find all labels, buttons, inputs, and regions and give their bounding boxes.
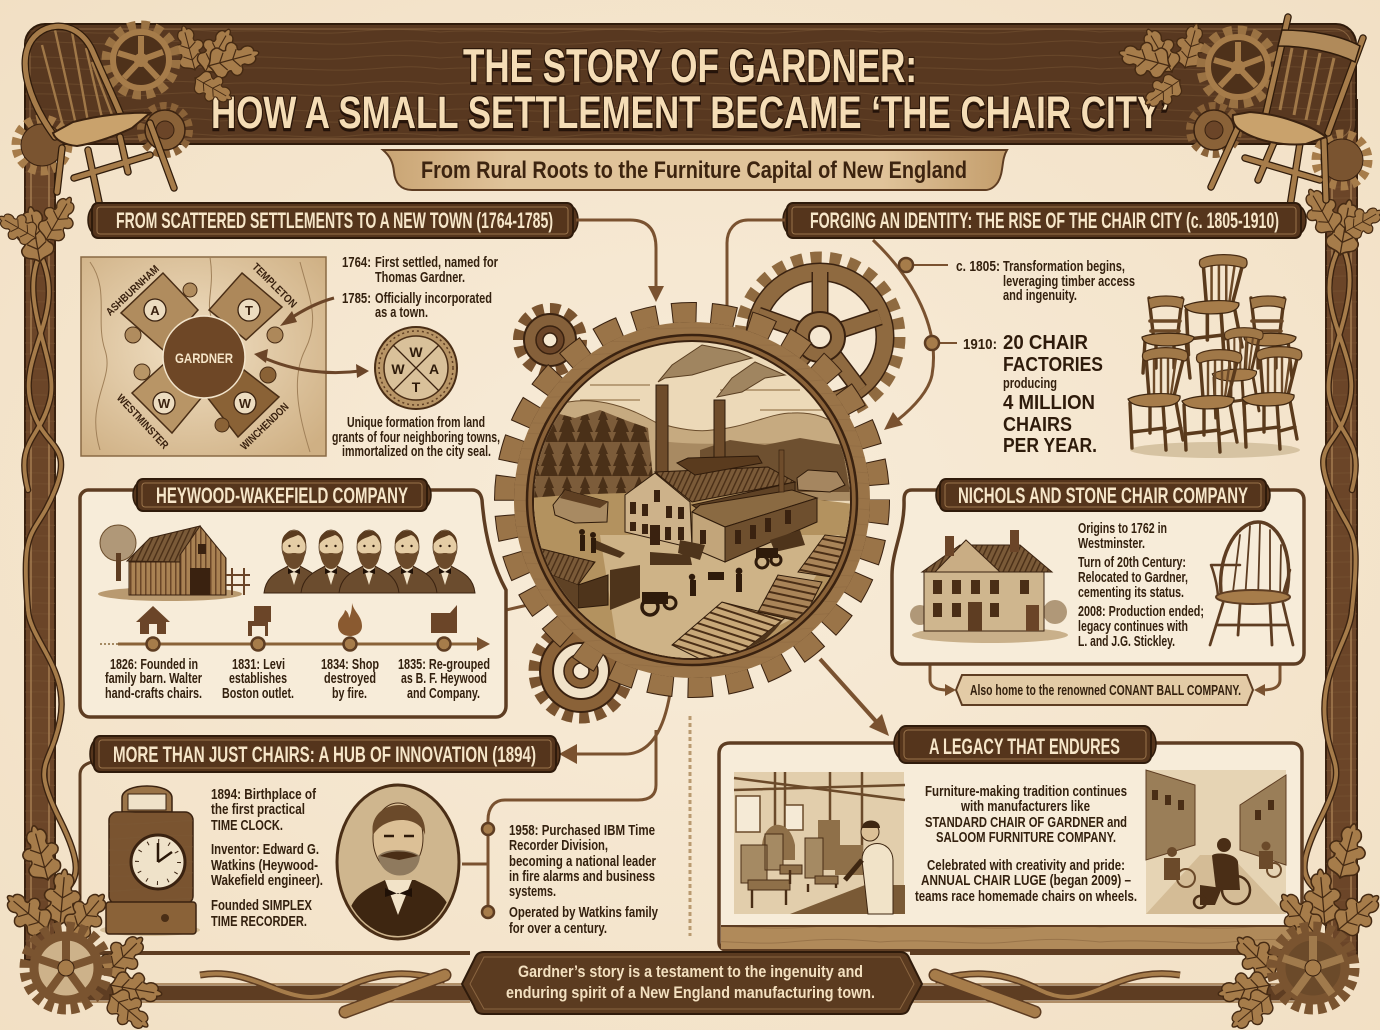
icon: chair [248,606,271,636]
Nichols history text: Relocated to Gardner, [1078,570,1188,586]
legacy text: teams race homemade chairs on wheels. [915,889,1137,905]
timeline 1910 statistics: PER YEAR. [1003,435,1097,457]
tractors and workers [579,529,781,615]
IBM and Watkins text: Operated by Watkins family [509,905,658,921]
timeline entry 1834: by fire. [332,686,367,702]
timeline entry 1834: 1834: Shop [321,657,379,673]
Nichols history text: Westminster. [1078,536,1145,552]
connector arrows around centre [462,220,1280,936]
arrow: 1785 to map [280,298,334,326]
oak leaves top corners [0,20,1380,265]
IBM and Watkins text: systems. [509,884,556,900]
title banner [25,24,1356,144]
settlement dates text: Thomas Gardner. [375,270,465,286]
timeline dots [482,258,939,918]
right trees [700,438,850,492]
illustration: Heywood brothers [264,530,475,593]
illustration: family barn [98,525,250,601]
section heading: forging an identity [783,203,1306,238]
Nichols history text [1078,521,1204,650]
wood strip [721,926,1300,949]
illustration: time clock [100,786,200,936]
legacy text [915,784,1137,905]
city seal [375,327,457,409]
Nichols history text: Origins to 1762 in [1078,521,1167,537]
heading: Nichols and Stone [936,479,1270,511]
factory building [625,450,817,562]
factory scene in gear [534,342,850,658]
heading: legacy [894,726,1156,763]
top-right gears [1190,31,1368,186]
timeline entry 1831: establishes [229,671,287,687]
puzzle piece: Westminster: W [158,396,171,411]
callout: Conant Ball [956,675,1253,705]
Nichols history text: 2008: Production ended; [1078,604,1204,620]
puzzle piece: Gardner: GARDNER [175,350,233,366]
legacy text: Celebrated with creativity and pride: [927,858,1125,874]
Windsor chair top-left [25,26,174,207]
legacy text: Furniture-making tradition continues [925,784,1127,800]
conclusion banner [462,952,922,1014]
callout: Conant Ball: Also home to the renowned CONANT BALL COMPANY. [970,683,1241,699]
heading: Nichols and Stone: NICHOLS AND STONE CHAIR COMPANY [958,483,1248,508]
puzzle piece: Ashburnham: A [150,303,160,318]
timeline 1910 statistics: CHAIRS [1003,414,1072,436]
formation caption: Unique formation from land [347,415,485,431]
section heading: scattered settlements: FROM SCATTERED SETTLEMENTS TO A NEW TOWN (1764-1785) [116,208,553,233]
illustration: Windsor chair [1210,522,1293,645]
settlement dates text: Officially incorporated [375,291,492,307]
IBM and Watkins text: 1958: Purchased IBM Time [509,823,655,839]
formation caption [332,415,500,460]
group of chairs [1128,255,1302,458]
panel: Heywood-Wakefield [80,479,506,717]
conclusion banner: Gardner’s story is a testament to the ingenuity and [518,962,863,981]
timeline entry 1834: destroyed [324,671,376,687]
puzzle piece: Winchendon [207,367,291,453]
lower-left workshop [542,548,608,610]
chimneys and smoke [656,345,785,475]
timeline entry 1826: family barn. Walter [105,671,202,687]
city seal: W [409,344,423,360]
settlement dates text: 1785: [342,291,371,307]
map of four towns [81,257,326,456]
Simplex text: TIME RECORDER. [211,914,307,930]
subtitle ribbon: From Rural Roots to the Furniture Capital of New England [421,157,967,184]
illustration: chair luge street race [1146,770,1286,914]
timeline c. 1805 text [956,259,1135,304]
puzzle piece: Templeton: T [245,303,253,318]
title [211,39,1170,138]
IBM and Watkins text: for over a century. [509,921,607,937]
puzzle piece: Gardner [163,316,245,398]
formation caption: immortalized on the city seal. [342,444,491,460]
timeline c. 1805 text: and ingenuity. [1003,288,1077,304]
legacy text: ANNUAL CHAIR LUGE (began 2009) – [921,873,1131,889]
puzzle piece: Winchendon: WINCHENDON [238,401,291,453]
timeline [100,637,490,651]
heading: Heywood-Wakefield [133,479,431,511]
equipment and carts [592,530,805,610]
subtitle ribbon [383,150,1007,190]
city seal: T [412,379,421,395]
corner gear bottom-left [25,927,107,1009]
Nichols history text: L. and J.G. Stickley. [1078,634,1175,650]
timeline entry 1831: Boston outlet. [222,686,294,702]
conclusion banner: enduring spirit of a New England manufacturing town. [506,983,875,1002]
puzzle piece: Templeton [209,261,299,343]
timeline entry 1826: hand-crafts chairs. [105,686,202,702]
puzzle piece: Templeton: TEMPLETON [249,261,299,311]
Simplex text: Inventor: Edward G. [211,842,319,858]
timeline c. 1805 text: leveraging timber access [1003,274,1135,290]
timeline entry 1831 [222,657,294,702]
settlement dates text: 1764: [342,255,371,271]
timeline c. 1805 text: c. 1805: [956,259,1000,275]
icon: ledger [431,605,457,633]
corner gear bottom-right [1272,927,1354,1009]
panel: A Legacy That Endures [719,726,1302,950]
small upper-left gear [519,309,581,371]
legacy text: SALOOM FURNITURE COMPANY. [936,830,1116,846]
timeline c. 1805 text: Transformation begins, [1003,259,1125,275]
timeline 1910 statistics: 4 MILLION [1003,392,1095,414]
Simplex text: 1894: Birthplace of [211,787,316,803]
panel: hub of innovation frame [80,762,92,925]
puzzle piece: Winchendon: W [239,396,252,411]
timeline 1910 statistics: FACTORIES [1003,354,1103,376]
illustration: workshop [734,772,905,914]
ground [534,493,850,658]
IBM and Watkins text: Recorder Division, [509,838,608,854]
timeline entry 1835: and Company. [407,686,480,702]
forest [532,410,655,498]
lower-left gear [534,624,628,718]
timeline 1910 statistics: 1910: [963,337,997,353]
IBM and Watkins text: becoming a national leader [509,854,656,870]
section heading: scattered settlements [88,203,578,238]
lower corner oak leaves [0,819,1380,1030]
heading: hub of innovation: MORE THAN JUST CHAIRS: A HUB OF INNOVATION (1894) [113,742,536,767]
illustration: house [910,530,1068,643]
puzzle piece: Westminster [114,363,202,452]
puzzle piece: Ashburnham: ASHBURNHAM [104,263,162,318]
legacy text: STANDARD CHAIR OF GARDNER and [925,815,1127,831]
timeline 1910 statistics [963,332,1103,457]
timeline entry 1826 [105,657,202,702]
Simplex text: TIME CLOCK. [211,818,283,834]
heading: legacy: A LEGACY THAT ENDURES [929,734,1120,759]
Nichols history text: Turn of 20th Century: [1078,555,1186,571]
city seal: A [429,361,439,377]
timeline entry 1831: 1831: Levi [232,657,285,673]
lumber piles [672,535,850,660]
timeline 1910 statistics: producing [1003,376,1057,392]
settlement dates text: First settled, named for [375,255,498,271]
Simplex text: the first practical [211,802,305,818]
puzzle piece: Westminster: WESTMINSTER [114,392,170,452]
slat-back chair top-right [1211,17,1363,213]
icon: fire [338,603,362,636]
IBM and Watkins text: in fire alarms and business [509,869,655,885]
heading: Heywood-Wakefield: HEYWOOD-WAKEFIELD COMPANY [156,483,408,508]
IBM and Watkins text [509,823,658,937]
timeline entry 1835: 1835: Re-grouped [398,657,490,673]
timeline entry 1826: 1826: Founded in [110,657,198,673]
timeline entry 1835: as B. F. Heywood [401,671,487,687]
Nichols history text: cementing its status. [1078,585,1184,601]
Simplex text [211,787,323,930]
Simplex text: Wakefield engineer). [211,873,323,889]
puzzle piece: Ashburnham [104,263,198,350]
central gear [504,312,880,688]
heading: hub of innovation [90,736,560,772]
timeline entry 1834 [321,657,379,702]
panel: Nichols and Stone [892,479,1304,664]
settlement dates text [342,255,498,321]
Simplex text: Founded SIMPLEX [211,898,312,914]
portrait: Edward G. Watkins [337,785,459,940]
title: THE STORY OF GARDNER: [463,39,917,92]
city seal: W [391,361,405,377]
sheds [553,470,845,523]
settlement dates text: as a town. [375,305,428,321]
large upper-right gear [742,259,898,415]
legacy text: with manufacturers like [960,799,1090,815]
icon: barn [136,606,170,634]
top-left gears [16,26,189,171]
hills [530,401,860,500]
climbing vines [24,250,1356,900]
arrow: Gardner to seal [254,349,369,378]
timeline entry 1835 [398,657,490,702]
formation caption: grants of four neighboring towns, [332,430,500,446]
Simplex text: Watkins (Heywood- [211,858,318,874]
timeline 1910 statistics: 20 CHAIR [1003,332,1089,354]
Nichols history text: legacy continues with [1078,619,1188,635]
